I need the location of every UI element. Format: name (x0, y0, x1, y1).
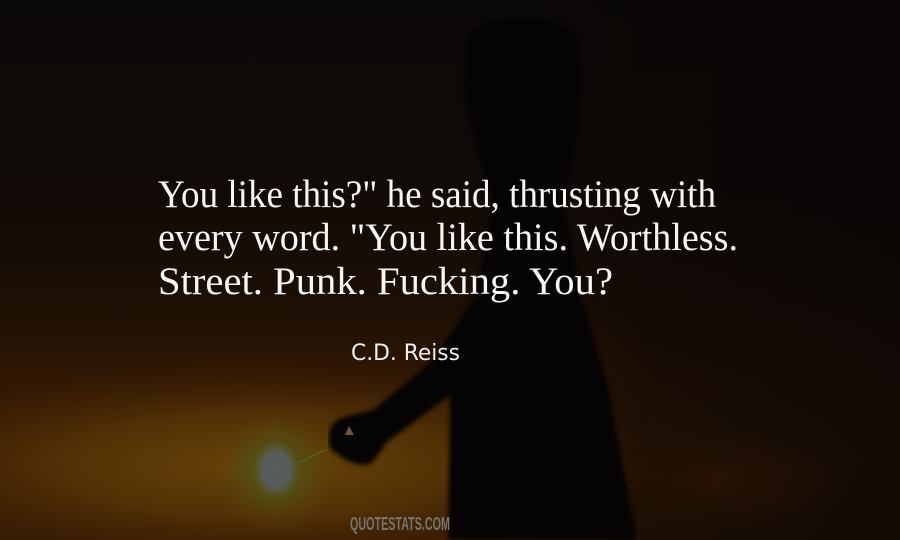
sparkler stick (298, 449, 327, 463)
quote text (158, 173, 738, 303)
quote line 3: Street. Punk. Fucking. You? (158, 260, 613, 303)
watermark: QUOTESTATS.COM (350, 514, 450, 534)
gap of light in the hand (345, 426, 354, 435)
silhouette: figure with outstretched arm (328, 17, 637, 540)
sun with halo (206, 400, 346, 540)
quote line 1: You like this?" he said, thrusting with (158, 173, 716, 216)
quote line 2: every word. "You like this. Worthless. (158, 216, 738, 259)
author name: C.D. Reiss (351, 341, 460, 366)
